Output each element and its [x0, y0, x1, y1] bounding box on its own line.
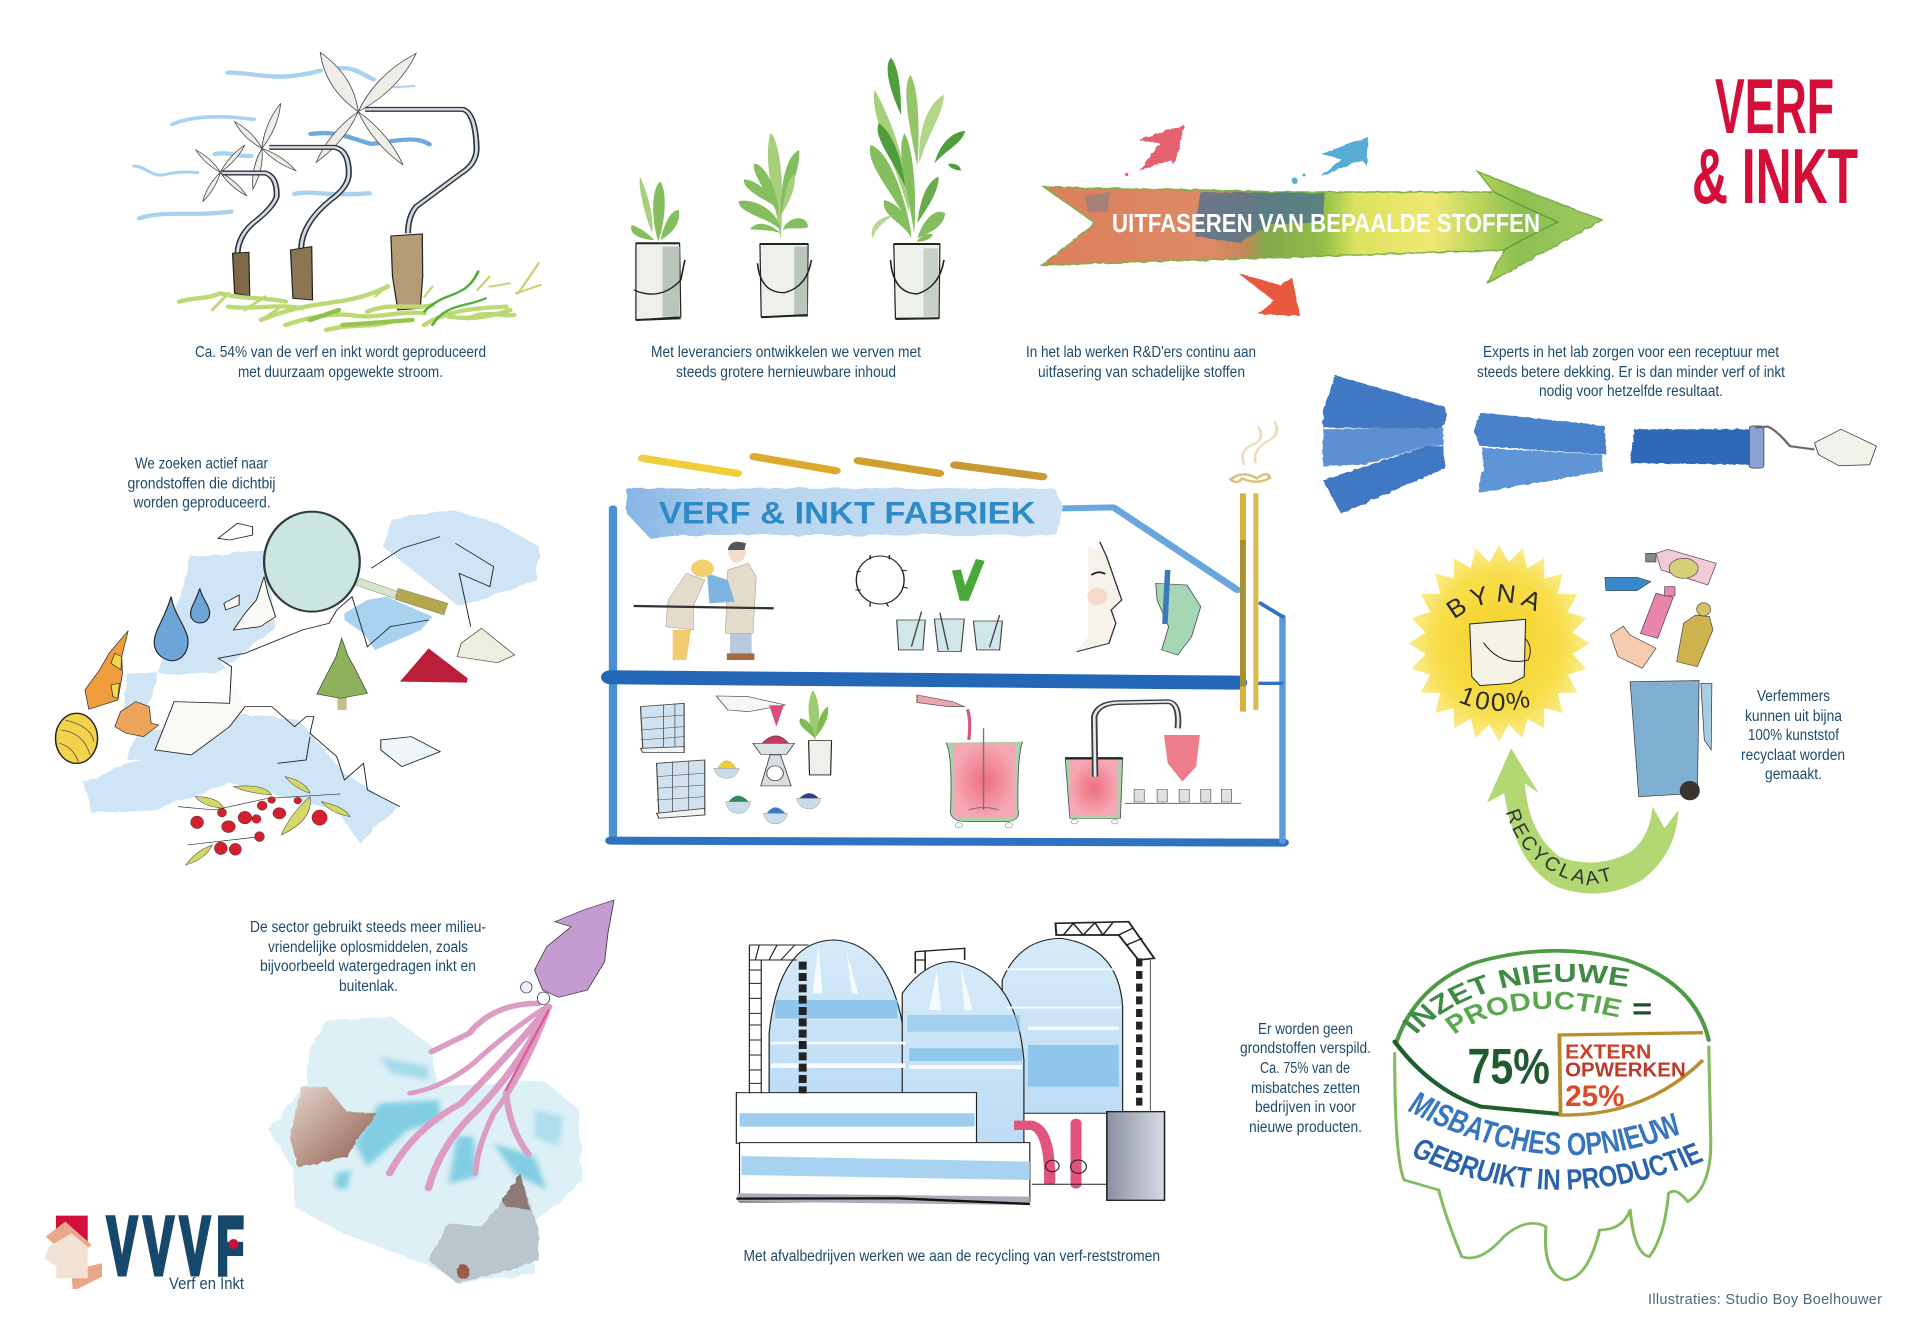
text block: misbatches: misbatches zetten	[1251, 1080, 1360, 1097]
icon: silo domes	[769, 938, 1123, 1143]
label: 100%	[1458, 702, 1544, 711]
text block: kunststof recyclaat	[1741, 688, 1845, 783]
text block: misbatches	[1240, 1021, 1371, 1136]
text block: duurzame stroom: met duurzaam opgewekte stroom.	[238, 364, 443, 381]
panel: misbatches paint blob: PRODUCTIE	[1444, 991, 1622, 1034]
icon: brown ink blot left	[290, 1087, 377, 1167]
text block: lab uitfasering	[1026, 344, 1256, 381]
text block: misbatches: Er worden geen	[1258, 1021, 1353, 1038]
text block: misbatches: grondstoffen verspild.	[1240, 1040, 1371, 1057]
icon: blob outline	[1395, 951, 1711, 1280]
icon: gold box	[1559, 1033, 1703, 1115]
map: sea wash	[84, 510, 540, 843]
icon: water drops	[154, 588, 210, 661]
icon: blue arrow up	[1292, 137, 1368, 184]
icon: pale blue wash	[269, 1017, 581, 1283]
text block: oplosmiddelen: bijvoorbeeld watergedragen inkt en	[260, 958, 476, 975]
icon: can shading	[662, 247, 938, 317]
icon: paint can in star	[1470, 619, 1530, 686]
icon: squid body	[521, 900, 614, 1005]
icon: grass	[180, 263, 541, 330]
text block: kunststof recyclaat: kunnen uit bijna	[1745, 708, 1842, 725]
icon: building blocks	[736, 1093, 1030, 1205]
logo: colour squares	[45, 1216, 102, 1289]
heading: factory banner: VERF & INKT FABRIEK	[659, 495, 1035, 530]
icon: plastic waste	[1605, 549, 1716, 668]
panel: windmills made of paint rollers	[134, 52, 541, 330]
arrow label: UITFASEREN VAN BEPAALDE STOFFEN	[1112, 208, 1540, 238]
panel: plants in paint cans	[631, 58, 1185, 320]
icon: yellow roof strokes	[643, 457, 1042, 477]
icon: face profile	[1074, 542, 1122, 653]
icon: rotor blades	[196, 52, 416, 202]
icon: roller handle frames	[222, 109, 477, 253]
label: gebruikt in productie	[1410, 1155, 1697, 1190]
text block: dekking: steeds betere dekking. Er is dan minder verf of inkt	[1477, 364, 1786, 381]
label: extern opwerken	[1565, 1040, 1686, 1112]
panel: misbatches paint blob	[1392, 948, 1712, 1282]
icon: orange arrow down	[1238, 273, 1300, 316]
heading: factory banner	[627, 488, 1063, 538]
text block: hernieuwbare inhoud	[651, 344, 922, 381]
map: iberia land	[155, 658, 245, 755]
text block: kunststof recyclaat: 100% kunststof	[1748, 727, 1840, 744]
icon: three beakers	[897, 612, 1002, 652]
text block: dekking	[1477, 344, 1786, 400]
icon: two paint strokes	[1474, 412, 1606, 493]
panel: recycled plastic loop	[1408, 545, 1717, 894]
panel: recycled plastic loop: BYNA	[1446, 584, 1537, 618]
text block: misbatches: Ca. 75% van de	[1260, 1060, 1350, 1077]
text block: oplosmiddelen	[250, 919, 486, 995]
text block: kunststof recyclaat: recyclaat worden	[1741, 747, 1845, 764]
text block: hernieuwbare inhoud: steeds grotere hernieuwbare inhoud	[676, 364, 896, 381]
text block: oplosmiddelen: De sector gebruikt steeds meer milieu-	[250, 919, 486, 936]
text block: grondstoffen dichtbij: We zoeken actief naar	[135, 456, 268, 472]
icon: plant leaves	[631, 58, 965, 242]
icon: grey tank	[1107, 1112, 1165, 1200]
icon: teal splashes	[335, 1057, 563, 1190]
map: baltic sea	[344, 597, 432, 650]
icon: second tank with tap	[1065, 702, 1178, 824]
icon: ladders and truss	[749, 922, 1154, 1112]
icon: single paint stroke	[1630, 429, 1753, 465]
icon: paint roller	[1749, 426, 1876, 468]
icon: storage containers	[641, 703, 705, 818]
icon: brown ink blot right	[428, 1173, 539, 1283]
icon: pink funnel filling cans	[1125, 735, 1241, 803]
icon: green check mark	[956, 560, 980, 600]
icon: scallop shell	[115, 702, 159, 737]
credit: Illustraties: Studio Boy Boelhouwer	[1648, 1292, 1882, 1308]
label: BYNA	[1454, 602, 1551, 622]
panel: recycled plastic loop: 100%	[1459, 688, 1530, 712]
panel: squid in ink wash	[45, 900, 614, 1289]
icon: can rims and handles	[634, 243, 944, 320]
logo: VVVF wordmark: VVVF	[107, 1201, 244, 1293]
text block: duurzame stroom: Ca. 54% van de verf en inkt wordt geproduceerd	[195, 344, 486, 361]
icon: three paint strokes	[1323, 375, 1446, 514]
title	[1692, 62, 1858, 220]
label: inzet nieuwe	[1416, 982, 1636, 1035]
icon: red pigment pile	[400, 648, 468, 683]
text block: misbatches: bedrijven in voor	[1255, 1099, 1356, 1116]
arrow: uitfaseren van bepaalde stoffen	[1042, 172, 1602, 283]
icon: squid tentacles	[390, 1003, 549, 1188]
icon: scientists at table	[634, 541, 774, 660]
icon: silo pale stripes	[771, 947, 1121, 1069]
text block: grondstoffen dichtbij	[128, 456, 276, 512]
icon: paint cans	[636, 243, 940, 320]
label: RECYCLAAT	[1506, 812, 1642, 885]
map: land outlines	[155, 523, 494, 807]
icon: wind strokes	[134, 68, 429, 218]
label: productie	[1454, 1009, 1623, 1035]
arrow: recyclaat	[1487, 748, 1678, 894]
icon: hand with pink pigment funnel	[716, 696, 785, 727]
text block: afvalbedrijven: Met afvalbedrijven werken we aan de recycling van verf-reststromen	[744, 1248, 1160, 1265]
icon: waste bin	[1630, 681, 1712, 800]
label: extern opwerken: OPWERKEN	[1565, 1058, 1686, 1081]
text block: kunststof recyclaat: gemaakt.	[1765, 766, 1822, 783]
label: misbatches opnieuw	[1406, 1110, 1682, 1155]
panel: misbatches paint blob: GEBRUIKT IN PRODUCTIE	[1414, 1140, 1704, 1190]
icon: pouring tube	[917, 695, 970, 740]
icon: magnifying glass	[264, 512, 448, 615]
panel: Europe map with raw materials	[55, 510, 540, 865]
title: VERF	[1715, 62, 1834, 150]
panel: recycled plastic loop: RECYCLAAT	[1506, 808, 1610, 886]
label: extern opwerken: EXTERN	[1565, 1040, 1651, 1063]
text block: dekking: nodig voor hetzelfde resultaat.	[1539, 383, 1723, 400]
text block: duurzame stroom	[195, 344, 486, 381]
icon: clam shell	[55, 713, 98, 763]
text block: kunststof recyclaat: Verfemmers	[1757, 688, 1830, 705]
label: extern opwerken: 25%	[1565, 1079, 1624, 1112]
icon: pine tree	[317, 638, 367, 710]
icon: kitchen scale with pigment	[753, 736, 794, 786]
logo: VVVF wordmark: Verf en Inkt	[169, 1274, 244, 1293]
text block: oplosmiddelen: vriendelijke oplosmiddelen, zoals	[268, 939, 468, 956]
text block: lab uitfasering: uitfasering van schadelijke stoffen	[1038, 364, 1245, 381]
panel: misbatches paint blob: INZET NIEUWE	[1402, 964, 1630, 1034]
icon: pigment bowls	[714, 761, 821, 824]
panel: misbatches paint blob: MISBATCHES OPNIEUW	[1408, 1092, 1679, 1156]
text block: grondstoffen dichtbij: worden geproduceerd.	[133, 494, 270, 512]
icon: gloved hand with test tube	[1156, 570, 1201, 655]
icon: berries and leaves	[178, 777, 350, 865]
icon: mixing tank	[946, 728, 1023, 828]
panel: waste recycling silos	[736, 922, 1165, 1205]
icon: silo colour bands	[775, 1000, 1119, 1087]
icon: small plant in can	[799, 690, 832, 775]
icon: factory frame	[611, 507, 1283, 843]
icon: roller grips	[233, 234, 423, 310]
icon: yellow star burst	[1409, 545, 1589, 742]
icon: white pigment pile	[457, 628, 515, 663]
icon: molecule ring	[855, 555, 908, 607]
icon: pink pipes with valves	[1014, 1123, 1107, 1184]
panel: paint and ink factory	[611, 422, 1283, 843]
text block: hernieuwbare inhoud: Met leveranciers ontwikkelen we verven met	[651, 344, 922, 361]
text block: lab uitfasering: In het lab werken R&D'ers continu aan	[1026, 344, 1256, 361]
text block: misbatches: nieuwe producten.	[1249, 1119, 1362, 1136]
icon: chimney	[1231, 422, 1277, 712]
text block: dekking: Experts in het lab zorgen voor een receptuur met	[1483, 344, 1780, 361]
text block: oplosmiddelen: buitenlak.	[339, 978, 398, 995]
panel: paint strokes and roller	[1323, 375, 1876, 514]
label: equals sign: =	[1632, 991, 1652, 1025]
icon: red arrow up	[1124, 125, 1185, 176]
text block: grondstoffen dichtbij: grondstoffen die dichtbij	[128, 476, 276, 492]
icon: spiral shell	[85, 631, 128, 709]
label: 75 percent: 75%	[1467, 1039, 1550, 1094]
